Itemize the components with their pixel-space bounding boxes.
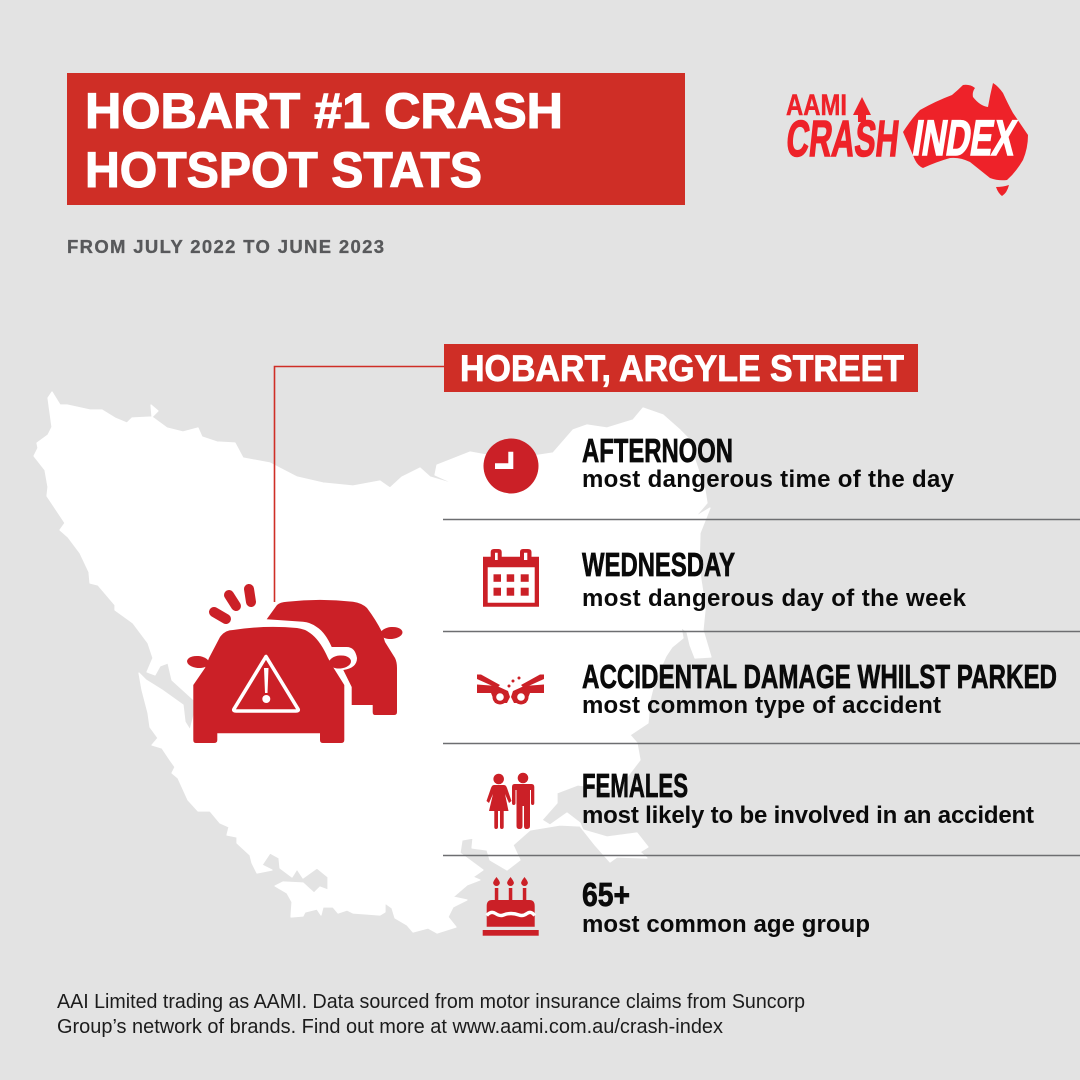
stat row: wednesday <box>483 546 967 612</box>
logo: AAMI Crash Index: AAMI <box>786 89 847 122</box>
icon: crashed cars with warning <box>187 589 403 743</box>
stat row: afternoon <box>484 432 955 494</box>
title panel: HOBART #1 CRASH <box>85 83 563 139</box>
icon: birthday cake <box>483 877 539 936</box>
logo: AAMI Crash Index: CRASH <box>784 110 902 167</box>
footer note: AAI Limited trading as AAMI. Data sourced from motor insurance claims from Suncorp <box>57 991 805 1013</box>
icon: woman and man <box>486 773 534 829</box>
stat row: accidental damage: most common type of accident <box>582 692 941 719</box>
icon: clock <box>484 438 538 494</box>
stat row: wednesday: most dangerous day of the week <box>582 585 967 612</box>
stat row: wednesday: WEDNESDAY <box>582 546 735 583</box>
leader line <box>274 366 444 602</box>
icon: calendar <box>483 549 539 607</box>
stat row: 65+ <box>483 876 870 938</box>
stat row: accidental damage <box>477 658 1057 719</box>
stat row: females: FEMALES <box>582 767 688 804</box>
location banner: HOBART, ARGYLE STREET <box>460 348 904 389</box>
icon: two cars colliding <box>477 674 544 704</box>
footer note <box>57 991 805 1038</box>
footer note: Group’s network of brands. Find out more at www.aami.com.au/crash-index <box>57 1016 723 1038</box>
map: Tasmania <box>34 392 711 933</box>
stat row: females <box>486 767 1034 829</box>
logo: AAMI Crash Index: INDEX <box>909 109 1021 166</box>
stat row: afternoon: AFTERNOON <box>582 432 733 469</box>
date range subtitle: FROM JULY 2022 TO JUNE 2023 <box>67 236 384 257</box>
title panel: HOTSPOT STATS <box>85 142 482 198</box>
stat row: 65+: 65+ <box>582 876 630 913</box>
stat row: females: most likely to be involved in an accident <box>582 802 1034 829</box>
logo: AAMI Crash Index <box>784 83 1028 196</box>
stat row: afternoon: most dangerous time of the day <box>582 466 955 493</box>
title panel <box>67 73 685 205</box>
stat row: 65+: most common age group <box>582 911 870 938</box>
